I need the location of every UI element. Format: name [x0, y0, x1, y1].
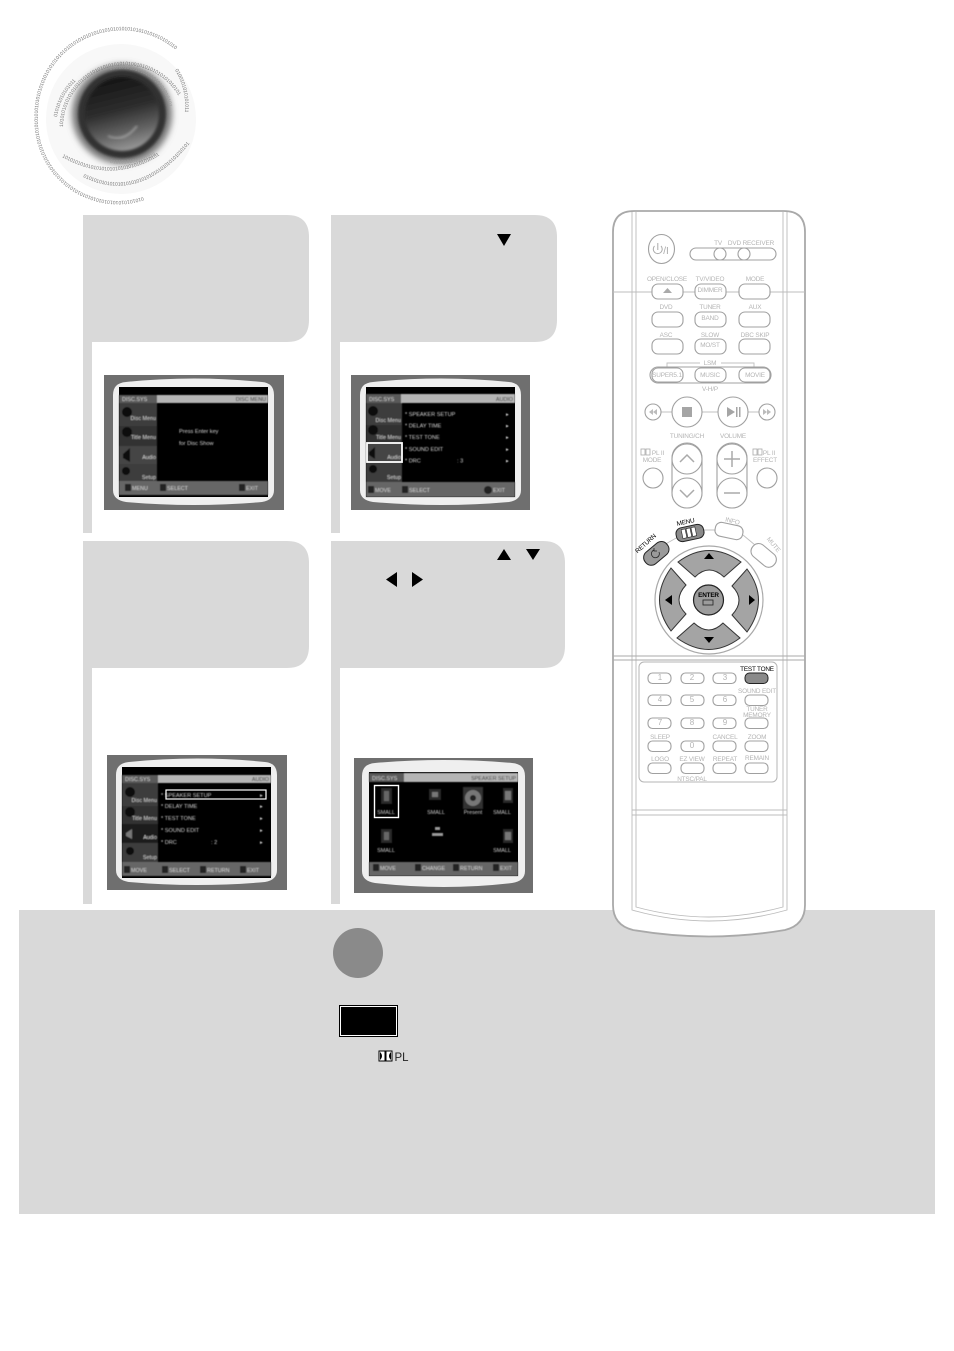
panel: step 2: [331, 215, 557, 533]
screen: audio menu: ▸: [506, 447, 509, 453]
number pad: REMAIN: [745, 755, 770, 762]
button rows: TUNER: [699, 304, 721, 311]
number pad: SOUND EDIT: [738, 688, 776, 695]
button rows: MODE: [746, 276, 764, 283]
number pad: 2: [690, 673, 695, 682]
screen: audio menu: MOVE: [375, 488, 391, 494]
number pad: TEST TONE: [740, 666, 774, 673]
number pad: 0: [690, 741, 695, 750]
button rows: V-H/P: [702, 386, 718, 393]
power and source selector: TV: [714, 240, 723, 247]
power and source selector: DVD RECEIVER: [728, 240, 775, 247]
screen: disc menu: EXIT: [246, 486, 259, 492]
screen: speaker layout: Present: [464, 810, 483, 816]
screen: speaker setup selected: ▸: [260, 840, 263, 846]
screen: speaker setup selected: * DRC: [161, 840, 177, 846]
screen: speaker layout: SPEAKER SETUP: [471, 776, 516, 782]
button rows: LSM: [704, 360, 716, 367]
screen: audio menu: * SOUND EDIT: [405, 447, 444, 453]
screen: disc menu: DISC MENU: [236, 397, 266, 403]
highlight: audio item: [367, 443, 402, 462]
direction pad: [655, 546, 763, 654]
number pad: CANCEL: [712, 734, 738, 741]
screen: disc menu: DISC.SYS: [122, 397, 148, 403]
menu, return, info, mute buttons: MUTE: [765, 536, 781, 554]
screen: speaker setup selected: ▸: [260, 828, 263, 834]
number pad: 7: [658, 718, 663, 727]
panel: step 4: [331, 541, 565, 904]
Dolby PL symbol: PL: [394, 1050, 409, 1064]
screen: speaker layout: SMALL: [493, 848, 511, 854]
channel and volume rockers: PL II: [652, 450, 664, 457]
screen: speaker layout: CHANGE: [422, 866, 445, 872]
screen: disc menu: Title Menu: [131, 435, 156, 441]
screen: audio menu: * SPEAKER SETUP: [405, 412, 456, 418]
icon: left arrow step 4: [386, 572, 397, 587]
number pad: ZOOM: [748, 734, 766, 741]
screen: speaker layout: EXIT: [500, 866, 513, 872]
screen: audio menu: [351, 375, 530, 510]
number pad: 5: [690, 695, 695, 704]
transport buttons: [645, 397, 775, 440]
screen: speaker setup selected: RETURN: [207, 868, 230, 874]
screen: speaker layout: DISC.SYS: [372, 776, 398, 782]
number pad: MEMORY: [743, 712, 772, 719]
menu, return, info, mute buttons: INFO: [724, 516, 740, 527]
screen: speaker setup selected: Audio: [143, 835, 157, 841]
screen: disc menu: MENU: [132, 486, 148, 492]
screen: audio menu: Audio: [387, 455, 401, 461]
button rows: MOVIE: [745, 372, 765, 379]
speaker graphic with binary rings: 0101010101010101010101010101010101010101010101010101010101010101010101010101010101010101010101010101010101010101010101010101010101011: [34, 26, 178, 204]
screen: disc menu: Press Enter key: [179, 429, 219, 435]
button rows: AUX: [749, 304, 762, 311]
button rows: MO/ST: [700, 342, 720, 349]
panel: step 3: [83, 541, 309, 904]
button rows: BAND: [701, 315, 719, 322]
button rows: DIMMER: [697, 287, 723, 294]
number pad: NTSC/PAL: [677, 776, 707, 783]
number pad: 3: [723, 673, 728, 682]
button rows: DBC SKIP: [741, 332, 769, 339]
screen: speaker layout: SMALL: [493, 810, 511, 816]
transport buttons: VOLUME: [720, 433, 746, 440]
panel: step 1: [83, 215, 309, 533]
direction pad: ENTER: [698, 592, 719, 599]
power and source selector: /I: [663, 246, 669, 257]
screen: speaker layout: [354, 758, 533, 893]
screen: speaker setup selected: * SOUND EDIT: [161, 828, 200, 834]
screen: audio menu: Disc Menu: [376, 418, 401, 424]
screen: speaker setup selected: [107, 755, 287, 890]
screen: speaker layout: SMALL: [377, 810, 395, 816]
icon: down arrow step 4: [526, 549, 540, 560]
menu, return, info, mute buttons: MENU: [676, 517, 696, 528]
button rows: MUSIC: [700, 372, 720, 379]
speaker graphic with binary rings: 01010101010101010: [110, 152, 156, 164]
screen: audio menu: Setup: [387, 475, 401, 481]
highlight: speaker icon: [374, 786, 398, 818]
button rows: ASC: [660, 332, 673, 339]
screen: audio menu: : 3: [457, 458, 463, 464]
icon: right arrow step 4: [412, 572, 423, 587]
screen: disc menu: [104, 375, 284, 510]
number pad: TUNER: [746, 706, 768, 713]
menu, return, info, mute buttons: [634, 516, 781, 570]
screen: audio menu: * DRC: [405, 458, 421, 464]
remote control: [613, 211, 805, 936]
transport buttons: TUNING/CH: [670, 433, 705, 440]
icon: up arrow step 4: [497, 549, 511, 560]
channel and volume rockers: EFFECT: [753, 457, 777, 464]
screen: speaker setup selected: * TEST TONE: [161, 816, 196, 822]
speaker graphic with binary rings: [34, 26, 190, 204]
screen: audio menu: * DELAY TIME: [405, 424, 442, 430]
screen: speaker setup selected: DISC.SYS: [125, 777, 151, 783]
screen: speaker layout: SMALL: [427, 810, 445, 816]
speaker graphic with binary rings: 0101010101010101010101010101: [110, 65, 172, 106]
number pad: 9: [723, 718, 728, 727]
panel: bottom note: [19, 910, 935, 1214]
screen: speaker setup selected: AUDIO: [252, 777, 269, 783]
button rows: SLOW: [701, 332, 720, 339]
screen: audio menu: EXIT: [493, 488, 506, 494]
screen: speaker setup selected: Disc Menu: [132, 798, 157, 804]
screen: disc menu: SELECT: [167, 486, 189, 492]
screen: speaker setup selected: * DELAY TIME: [161, 804, 198, 810]
remote body detail lines: [613, 212, 805, 921]
menu, return, info, mute buttons: RETURN: [634, 532, 658, 555]
speaker graphic with binary rings: 0101010101010101010101010101010101010101010101010: [84, 142, 190, 186]
screen: speaker setup selected: : 2: [211, 840, 217, 846]
screen: audio menu: ▸: [506, 435, 509, 441]
note number circle: [333, 928, 383, 978]
icon: down arrow step 2: [497, 234, 511, 246]
screen: audio menu: Title Menu: [376, 435, 401, 441]
screen: speaker setup selected: * SPEAKER SETUP: [161, 793, 212, 799]
screen: disc menu: for Disc Show: [179, 441, 214, 447]
screen: speaker setup selected: MOVE: [131, 868, 147, 874]
screen: disc menu: Setup: [142, 475, 156, 481]
screen: speaker setup selected: ▸: [260, 804, 263, 810]
screen: audio menu: SELECT: [409, 488, 431, 494]
screen: speaker setup selected: Title Menu: [132, 816, 157, 822]
power and source selector: [648, 234, 776, 264]
screen: disc menu: Disc Menu: [131, 416, 156, 422]
screen: speaker setup selected: SELECT: [169, 868, 191, 874]
speaker graphic with binary rings: 010101010101011: [54, 79, 76, 117]
screen: audio menu: ▸: [506, 458, 509, 464]
button rows: OPEN/CLOSE: [647, 276, 687, 283]
highlight: speaker setup row: [166, 790, 266, 799]
screen: speaker layout: MOVE: [380, 866, 396, 872]
Dolby PL symbol: [379, 1050, 409, 1064]
screen: audio menu: * TEST TONE: [405, 435, 440, 441]
channel and volume rockers: PL II: [763, 450, 775, 457]
channel and volume rockers: MODE: [643, 457, 661, 464]
number pad: 6: [723, 695, 728, 704]
button rows: [647, 276, 771, 393]
number pad: 1: [658, 673, 663, 682]
screen: speaker setup selected: EXIT: [247, 868, 260, 874]
remote body: [613, 211, 805, 936]
screen: speaker setup selected: ▸: [260, 793, 263, 799]
channel and volume rockers: [641, 443, 777, 508]
screen: speaker setup selected: ▸: [260, 816, 263, 822]
note badge: [340, 1006, 398, 1036]
number pad: EZ VIEW: [679, 756, 706, 763]
button rows: TV/VIDEO: [696, 276, 724, 283]
number pad: [639, 662, 777, 783]
number pad: 4: [658, 695, 663, 704]
screen: audio menu: ▸: [506, 412, 509, 418]
screen: audio menu: DISC.SYS: [369, 397, 395, 403]
number pad: SLEEP: [650, 734, 670, 741]
screen: disc menu: Audio: [142, 455, 156, 461]
number pad: LOGO: [651, 756, 669, 763]
speaker graphic with binary rings: 0100101010101011: [176, 68, 189, 112]
screen: audio menu: ▸: [506, 424, 509, 430]
screen: speaker layout: RETURN: [460, 866, 483, 872]
screen: audio menu: AUDIO: [496, 397, 513, 403]
screen: speaker layout: SMALL: [377, 848, 395, 854]
button rows: DVD: [659, 304, 673, 311]
button rows: SUPER5.1: [652, 372, 682, 379]
screen: speaker setup selected: Setup: [143, 855, 157, 861]
number pad: REPEAT: [713, 756, 737, 763]
number pad: 8: [690, 718, 695, 727]
